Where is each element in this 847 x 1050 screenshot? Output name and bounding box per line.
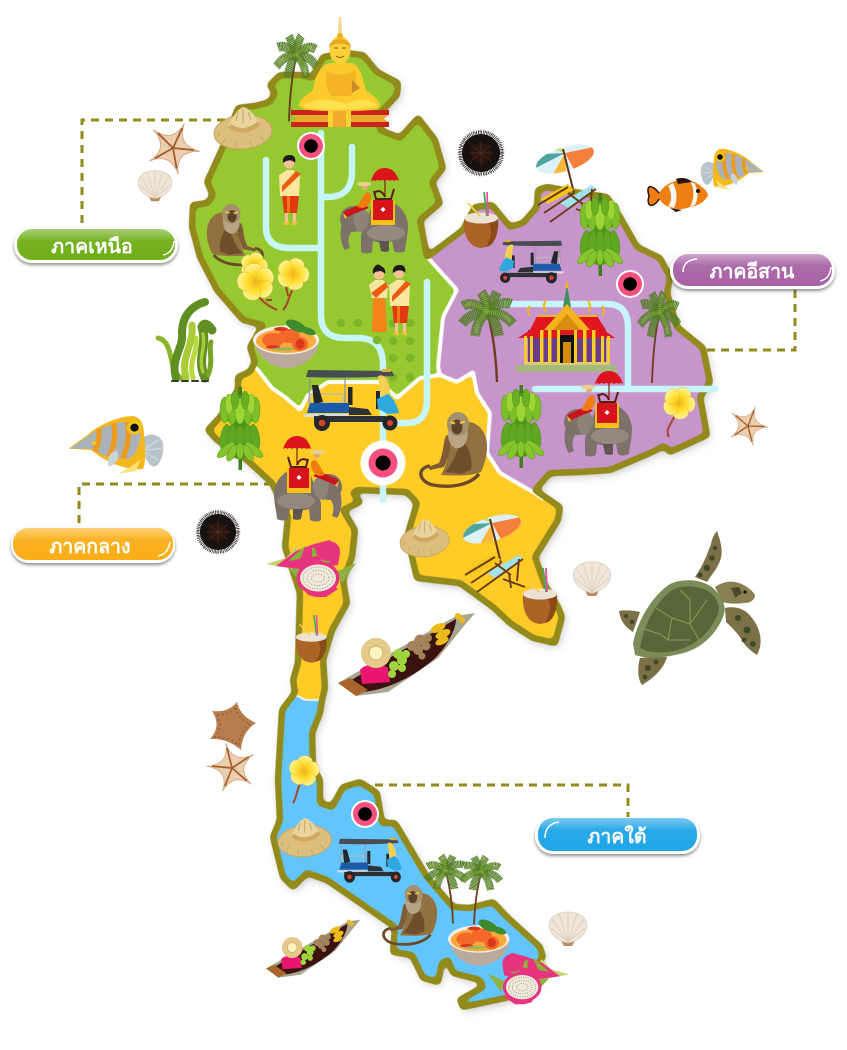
icon: sea urchin left <box>197 511 239 553</box>
label: northeast region <box>670 252 835 289</box>
region: south blue <box>276 696 539 1002</box>
label: central region: ภาคกลาง <box>49 536 131 558</box>
icon: shell lower right <box>549 912 587 946</box>
icon: sea turtle <box>619 531 761 685</box>
icon: monkey central <box>421 412 487 486</box>
icon: frangipani flowers <box>232 248 316 310</box>
icon: bananas west <box>215 387 265 470</box>
label: north region: ภาคเหนือ <box>51 236 133 258</box>
map of Thailand with four regions <box>188 50 718 1014</box>
icon: straw hat north <box>213 107 273 151</box>
label: south region: ภาคใต้ <box>587 825 647 848</box>
icon: starfish top left <box>140 113 208 179</box>
icon: butterfly fish top right <box>701 149 764 190</box>
icon: clownfish <box>648 178 708 212</box>
icon: floating market boat large <box>338 613 475 696</box>
region: northeast purple <box>430 190 706 490</box>
label: north region <box>14 227 178 263</box>
map border <box>192 53 710 1007</box>
dashed connector: northeast label <box>705 290 795 350</box>
region fills clipped to the country shape <box>195 56 706 1002</box>
icon: dragon fruit south <box>488 953 569 1004</box>
icon: monkey north <box>207 204 262 265</box>
icon: bananas northeast bottom <box>496 385 546 468</box>
dashed connector: north label <box>82 120 225 226</box>
icon: tom yum bowl north <box>253 317 319 368</box>
icon: seaweed <box>158 302 212 381</box>
icon: tuk-tuk south <box>337 838 402 883</box>
icon: starfish lower left <box>202 738 260 794</box>
label: northeast region: ภาคอีสาน <box>710 260 795 283</box>
icon: beach umbrella and chairs central <box>453 507 531 592</box>
icon: elephant with rider northeast <box>564 371 632 456</box>
green field dots <box>337 319 414 381</box>
icon: monkey south <box>384 885 437 944</box>
icon: palm tree northeast right <box>640 293 678 383</box>
pin: central <box>360 440 406 486</box>
icon: golden Buddha statue <box>291 17 389 127</box>
icon: elephant with rider north <box>340 168 408 254</box>
icon: man in Thai costume <box>279 155 301 225</box>
icon: shell left <box>138 171 172 201</box>
icon: cookie starfish <box>210 702 256 750</box>
icon: frangipani south <box>284 753 323 803</box>
icon: palm tree south left <box>427 856 465 924</box>
icon: coconut drink southeast coast <box>523 568 557 624</box>
icon: dragon fruit central <box>266 540 356 597</box>
icon: Thai temple <box>516 280 617 372</box>
icon: straw hat central <box>399 519 450 559</box>
icon: couple in Thai costume <box>369 264 411 335</box>
woman <box>369 264 388 332</box>
icon: tom yum bowl south <box>448 917 509 966</box>
rivers <box>266 133 715 500</box>
pin: northeast <box>616 270 644 298</box>
pin: north <box>297 132 325 160</box>
dashed connector: central label <box>79 484 272 526</box>
icon: bananas northeast top <box>575 193 625 276</box>
icon: palm tree northeast left <box>462 292 513 382</box>
icon: frangipani northeast <box>654 380 702 437</box>
icon: butterfly fish left <box>68 416 163 474</box>
dashed connector: south label <box>375 785 628 818</box>
icon: starfish right <box>724 400 774 448</box>
icon: straw hat south <box>277 818 333 859</box>
icon: tuk-tuk central <box>303 369 399 431</box>
map base: central region yellow with drop shadow <box>192 53 710 1007</box>
pin: south <box>351 800 379 828</box>
icon: coconut drink peninsula <box>296 615 327 663</box>
icon: beach umbrella and chairs northeast <box>526 137 604 222</box>
icon: shell centre right <box>573 562 611 596</box>
icon: elephant with rider central <box>274 436 342 522</box>
label: south region <box>535 817 700 854</box>
icon: palm tree north <box>276 36 316 122</box>
icon: floating market boat small <box>266 920 361 978</box>
icon: tuk-tuk northeast <box>499 240 564 283</box>
icon: sea urchin top <box>459 131 503 175</box>
icon: palm tree south right <box>462 857 500 924</box>
region: north green <box>195 56 454 406</box>
label: central region <box>11 527 175 563</box>
icon: coconut drink northeast <box>464 192 498 248</box>
white region boundaries <box>250 255 545 702</box>
